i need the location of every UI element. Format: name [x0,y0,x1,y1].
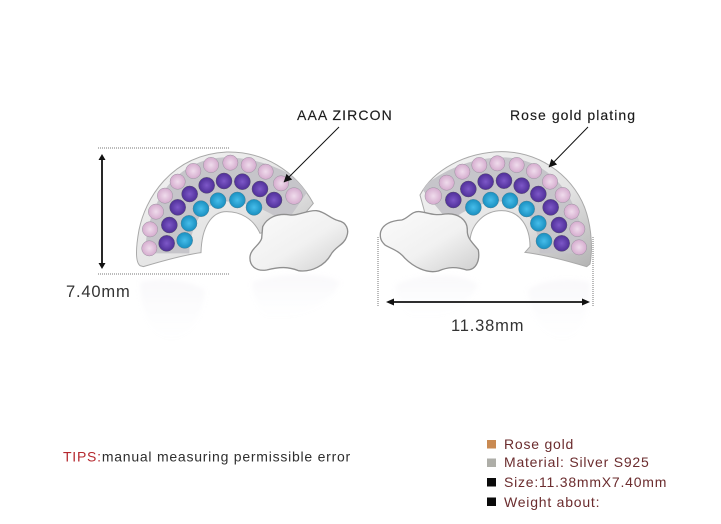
callout: Rose gold plating: Rose gold plating [510,107,636,123]
pink stones: right earring [425,156,587,255]
callout: AAA ZIRCON: AAA ZIRCON [297,107,393,123]
legend item: rose gold: Rose gold [504,436,574,452]
pink stones: left earring [142,155,302,256]
callout: Rose gold plating [510,107,636,167]
height dimension: 7.40mm [66,148,230,301]
reflection: right earring [395,275,590,340]
legend item: material: Material: Silver S925 [504,454,650,470]
tips note: TIPS:manual measuring permissible error [63,448,351,464]
cloud: right earring [380,212,479,272]
width dimension: 11.38mm: 11.38mm [451,317,524,335]
setting band: right earring [435,179,562,253]
rainbow arch: right earring [420,152,591,267]
blue stones: left earring [177,192,262,248]
width dimension: 11.38mm [378,237,593,335]
right earring [380,152,591,272]
cloud: left earring [250,211,348,271]
legend item: weight: Weight about: [504,494,600,510]
blue stones: right earring [465,192,552,249]
legend: product specs [487,436,667,510]
reflection: left earring [140,274,340,340]
purple stones: left earring [159,173,282,251]
setting band: left earring [167,179,298,253]
height dimension: 7.40mm: 7.40mm [66,283,131,301]
purple stones: right earring [445,173,570,251]
left earring [136,152,348,271]
legend item: size: Size:11.38mmX7.40mm [504,474,667,490]
rainbow arch: left earring [136,152,313,267]
callout: AAA ZIRCON [284,107,393,182]
